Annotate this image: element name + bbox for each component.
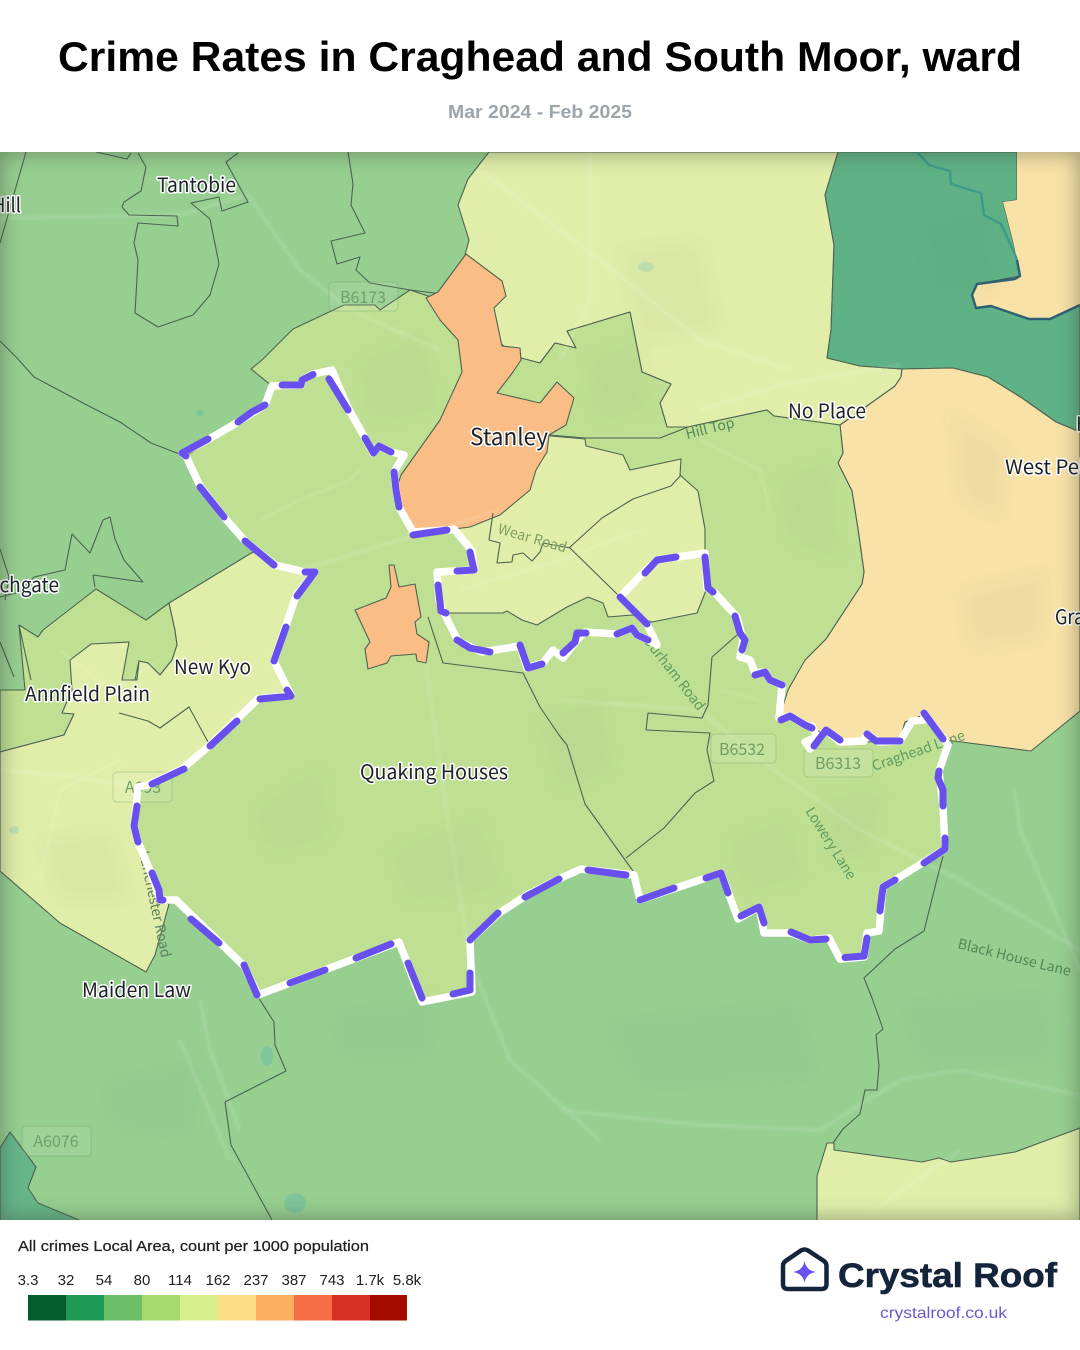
website url: crystalroof.co.uk	[880, 1305, 1008, 1322]
region: South Moor orange	[355, 565, 429, 669]
legend	[18, 1238, 422, 1320]
road number shield: A6076: A6076	[33, 1128, 79, 1152]
region: central light green area containing the ward	[134, 290, 945, 1002]
region: east sand area	[780, 368, 1080, 751]
place label: Quaking Houses: Quaking Houses	[360, 756, 508, 785]
road number shield: A693	[113, 772, 172, 802]
road label: Black House Lane: Black House Lane	[956, 933, 1073, 981]
region: Annfield Plain light green	[0, 589, 177, 752]
road label: Lanchester Road: Lanchester Road	[134, 849, 176, 959]
region: south-west dark green patch	[0, 1132, 80, 1225]
title: Crime Rates in Craghead and South Moor, ward	[58, 33, 1022, 80]
map edge vignette	[0, 152, 1080, 1220]
region: west pale area	[0, 552, 315, 972]
legend title: All crimes Local Area, count per 1000 population	[18, 1238, 369, 1255]
settlement street blocks	[61, 440, 770, 700]
legend scale values: 3.3	[18, 1272, 38, 1289]
place label: Maiden Law: Maiden Law	[82, 974, 191, 1003]
place label: No Place: No Place	[788, 395, 866, 424]
road number shield: A6076	[22, 1126, 91, 1156]
river boundary	[972, 260, 1080, 319]
choropleth map	[0, 152, 1080, 1225]
road label: Wear Road: Wear Road	[496, 519, 569, 557]
place label: Annfield Plain: Annfield Plain	[25, 678, 150, 707]
brand name: Crystal Roof	[838, 1257, 1058, 1295]
place label: New Kyo: New Kyo	[174, 651, 251, 680]
ward boundary: white base line	[134, 370, 948, 1002]
road number shield: B6532	[711, 734, 776, 763]
legend scale values: 162	[205, 1272, 231, 1289]
terrain texture patches	[965, 435, 1036, 636]
legend scale values: 80	[134, 1272, 150, 1289]
thin ward and local-area boundaries	[0, 152, 943, 1220]
region: Stanley orange	[396, 254, 574, 532]
legend scale values: 237	[243, 1272, 269, 1289]
road label: Craghead Lane: Craghead Lane	[869, 725, 968, 776]
region: south-east pale area	[817, 1128, 1080, 1225]
region: top pale area north of Stanley	[458, 152, 902, 427]
road number shield: B6313: B6313	[815, 750, 861, 774]
legend scale values: 1.7k	[356, 1272, 385, 1289]
ward boundary: purple dashes	[134, 374, 945, 998]
river through dark green	[917, 152, 1017, 260]
legend colour bar	[28, 1295, 407, 1320]
legend scale values: 743	[319, 1272, 345, 1289]
road label: Durham Road: Durham Road	[639, 632, 710, 715]
legend scale values: 54	[96, 1272, 112, 1289]
place label: Stanley: Stanley	[470, 418, 548, 452]
region: north-east dark green	[825, 152, 1080, 432]
legend scale values: 114	[168, 1272, 192, 1289]
road number shield: B6532: B6532	[719, 736, 765, 760]
legend scale values: 387	[281, 1272, 307, 1289]
brand logo	[783, 1250, 1058, 1322]
place label: Tantobie: Tantobie	[157, 169, 236, 198]
legend scale values	[18, 1272, 422, 1289]
road label: Hill Top: Hill Top	[683, 412, 736, 444]
icon: house with star	[783, 1250, 826, 1289]
region: central pale area	[437, 435, 707, 625]
lighter road network	[6, 194, 1077, 1161]
legend scale values: 5.8k	[393, 1272, 422, 1289]
road number shield: B6173	[329, 282, 398, 311]
road number shield: B6313	[804, 749, 873, 777]
road number shield: A693: A693	[125, 774, 161, 798]
road number shield: B6173: B6173	[340, 284, 386, 308]
legend scale values: 32	[58, 1272, 74, 1289]
water bodies	[9, 262, 654, 1213]
subtitle: date range: Mar 2024 - Feb 2025	[448, 101, 632, 122]
road label: Lowery Lane: Lowery Lane	[801, 803, 861, 883]
region: north-east corner sand	[972, 152, 1080, 319]
